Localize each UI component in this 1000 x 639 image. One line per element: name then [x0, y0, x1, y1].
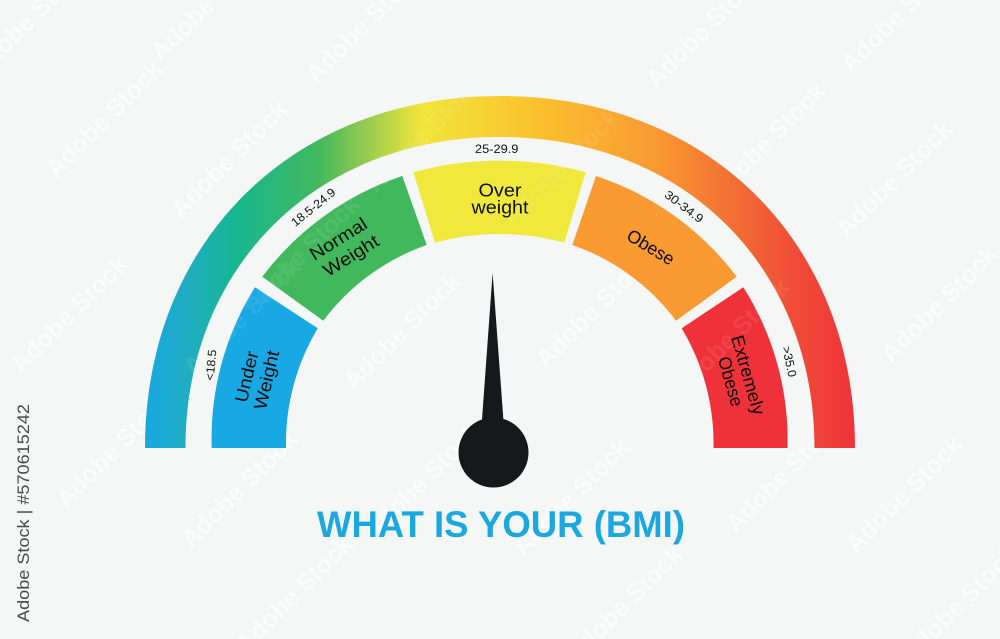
range label: over 35.0: >35.0	[779, 345, 799, 379]
title: WHAT IS YOUR (BMI)	[317, 504, 685, 545]
range label: 18.5-24.9: 18.5-24.9	[288, 185, 339, 229]
segment: normal weight: Weight	[319, 231, 383, 281]
gauge needle	[458, 273, 528, 488]
segment: normal weight	[262, 176, 427, 321]
segment: obese	[572, 176, 737, 321]
watermark pattern: Adobe Stock	[5, 250, 133, 378]
side stock id: Adobe Stock | #570615242	[14, 404, 33, 622]
faint watermark over coloured segments: Adobe Stock	[497, 103, 625, 231]
segment: overweight: Over	[478, 180, 522, 200]
watermark pattern: Adobe Stock	[703, 77, 831, 205]
watermark pattern: Adobe Stock	[40, 55, 168, 183]
segment: extremely obese: Extremely	[727, 333, 769, 417]
faint watermark over coloured segments	[178, 70, 795, 401]
range label: 25-29.9: 25-29.9	[475, 142, 519, 156]
watermark pattern: Adobe Stock	[720, 410, 848, 538]
watermark pattern: Adobe Stock	[50, 385, 178, 513]
faint watermark over coloured segments: Adobe Stock	[237, 190, 365, 318]
outer gradient arc	[145, 96, 855, 448]
faint watermark over coloured segments: Adobe Stock	[360, 70, 488, 198]
watermark pattern: Adobe Stock	[165, 95, 293, 223]
watermark pattern: Adobe Stock	[507, 433, 635, 561]
faint watermark over coloured segments: Adobe Stock	[178, 253, 306, 381]
watermark pattern: Adobe Stock	[358, 417, 486, 545]
watermark pattern: Adobe Stock	[875, 240, 1000, 368]
watermark pattern: Adobe Stock	[175, 425, 303, 553]
range label: under 18.5: <18.5	[203, 349, 219, 381]
segment: under weight	[212, 287, 318, 448]
segment: overweight	[413, 161, 586, 243]
segment: under weight: Weight	[250, 349, 283, 411]
segment: overweight: weight	[470, 198, 528, 218]
segment: extremely obese	[682, 287, 788, 448]
watermark pattern: Adobe Stock	[840, 430, 968, 558]
segment: obese: Obese	[623, 225, 678, 269]
segment: normal weight: Normal	[306, 214, 371, 264]
faint watermark over coloured segments: Adobe Stock	[667, 273, 795, 401]
segment: under weight: Under	[231, 349, 262, 404]
range label: 30-34.9: 30-34.9	[662, 188, 706, 226]
watermark pattern: Adobe Stock	[338, 267, 466, 395]
watermark pattern: Adobe Stock	[830, 115, 958, 243]
watermark pattern: Adobe Stock	[530, 245, 658, 373]
segment: extremely obese: Obese	[714, 354, 747, 409]
